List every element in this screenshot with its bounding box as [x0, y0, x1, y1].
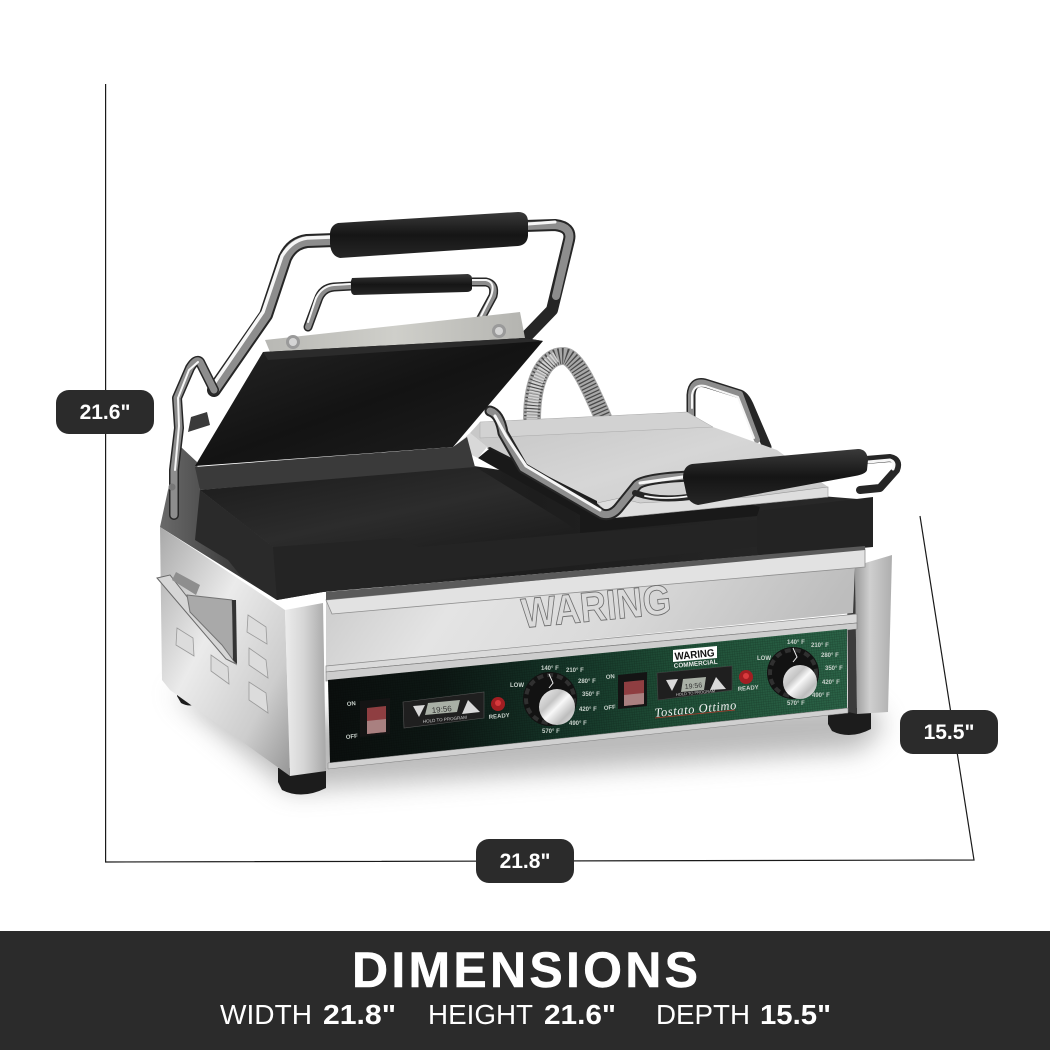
control panel [328, 629, 848, 769]
floor shadow [170, 690, 885, 790]
footer dimensions line: DEPTH [656, 999, 750, 1030]
right temperature scale [757, 640, 843, 707]
front drawer [326, 546, 865, 681]
right power switch [604, 672, 647, 712]
footer dimensions line: WIDTH [220, 999, 312, 1030]
footer heading: DIMENSIONS [352, 942, 698, 998]
black slab under right plate [478, 440, 760, 533]
right upper plate assembly [454, 356, 897, 533]
front right pillar [855, 555, 892, 714]
right ready light: READY [738, 685, 759, 693]
black raised platen face [195, 338, 543, 466]
left temperature scale: 140° F [541, 666, 559, 672]
right digital display: 19:56 [685, 682, 703, 691]
Waring Commercial logo [673, 646, 718, 670]
left temperature scale: 280° F [578, 679, 596, 685]
front black grip [683, 449, 868, 505]
left power switch: ON [347, 701, 356, 708]
big black grip [330, 212, 528, 258]
left digital display: 19:56 [431, 704, 453, 715]
left ready light: READY [489, 713, 510, 721]
left temperature knob [523, 672, 577, 726]
plate front edge [597, 487, 828, 518]
label: depth: 15.5" [924, 721, 974, 744]
steel collar beside platen [454, 433, 487, 458]
right temperature scale: LOW [757, 656, 771, 662]
right temperature scale: 210° F [811, 643, 829, 649]
left power switch: OFF [346, 734, 358, 741]
steel backing plate [265, 312, 525, 352]
back chrome handle [691, 382, 767, 447]
silver top plate [470, 412, 828, 518]
left power switch [346, 698, 390, 741]
right temperature scale: 570° F [787, 701, 805, 707]
left digital display: HOLD TO PROGRAM [423, 715, 467, 724]
dimension labels [56, 390, 998, 883]
left temperature scale: 570° F [542, 729, 560, 735]
left temperature scale: 490° F [569, 721, 587, 727]
right temperature scale: 490° F [812, 693, 830, 699]
hinge chrome [168, 361, 214, 515]
side latch [157, 572, 237, 664]
label: depth [900, 710, 998, 754]
textured lower edge strip [195, 437, 475, 490]
footer dimensions line: 15.5" [760, 999, 831, 1030]
flexible conduit [532, 356, 611, 436]
Tostato Ottimo wordmark: Tostato Ottimo [654, 698, 737, 720]
footer dimensions line: 21.8" [323, 999, 396, 1030]
big chrome handle [213, 222, 569, 390]
label: height: 21.6" [80, 401, 130, 424]
front chrome handle [490, 411, 897, 515]
right temperature scale: 140° F [787, 640, 805, 646]
left temperature scale: 420° F [579, 707, 597, 713]
left temperature scale [510, 666, 600, 735]
left raised upper platen [168, 212, 569, 515]
right temperature scale: 280° F [821, 653, 839, 659]
label: width [476, 839, 574, 883]
side steel panel [160, 527, 290, 776]
feet [177, 680, 871, 795]
raised Waring logo: WARING [519, 576, 673, 637]
left ready light [489, 697, 510, 721]
right temperature knob [767, 647, 819, 699]
footer band [0, 931, 1050, 1050]
label: width: 21.8" [500, 850, 550, 873]
right temperature scale: 420° F [822, 680, 840, 686]
label: height [56, 390, 154, 434]
right digital display [657, 666, 732, 700]
Waring Commercial logo: WARING [674, 647, 715, 663]
left temperature scale: 210° F [566, 668, 584, 674]
footer dimensions line: 21.6" [544, 999, 616, 1030]
right ready light [738, 670, 759, 693]
left digital display [403, 692, 484, 728]
right power switch: OFF [604, 705, 616, 712]
product: Waring panini grill [157, 212, 897, 795]
lower left cooking plate [195, 466, 870, 600]
dimension lines [106, 84, 974, 862]
right power switch: ON [606, 674, 615, 681]
front left pillar [285, 603, 326, 776]
right digital display: HOLD TO PROGRAM [676, 688, 715, 697]
left temperature scale: LOW [510, 683, 524, 689]
Waring Commercial logo: COMMERCIAL [674, 659, 718, 670]
small chrome handle [308, 280, 494, 327]
side dimples [176, 615, 268, 713]
left temperature scale: 350° F [582, 692, 600, 698]
right temperature scale: 350° F [825, 666, 843, 672]
rear hinge casing [160, 447, 277, 600]
footer dimensions line [220, 999, 831, 1030]
footer dimensions line: HEIGHT [428, 999, 533, 1030]
small black grip [351, 274, 472, 295]
right end block of lower plate [757, 497, 873, 557]
